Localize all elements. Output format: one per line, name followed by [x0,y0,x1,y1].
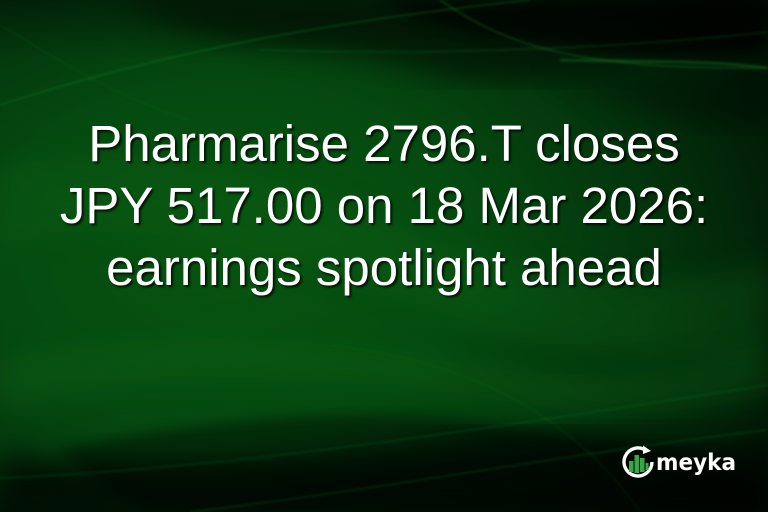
wordmark: meyka [656,450,736,476]
title: JPY 517.00 on 18 Mar 2026: [60,177,708,234]
logo: meyka [622,446,736,478]
icon: ring with bars [624,446,652,476]
title: earnings spotlight ahead [106,239,662,296]
title: Pharmarise 2796.T closes [88,115,680,172]
title [60,115,708,298]
